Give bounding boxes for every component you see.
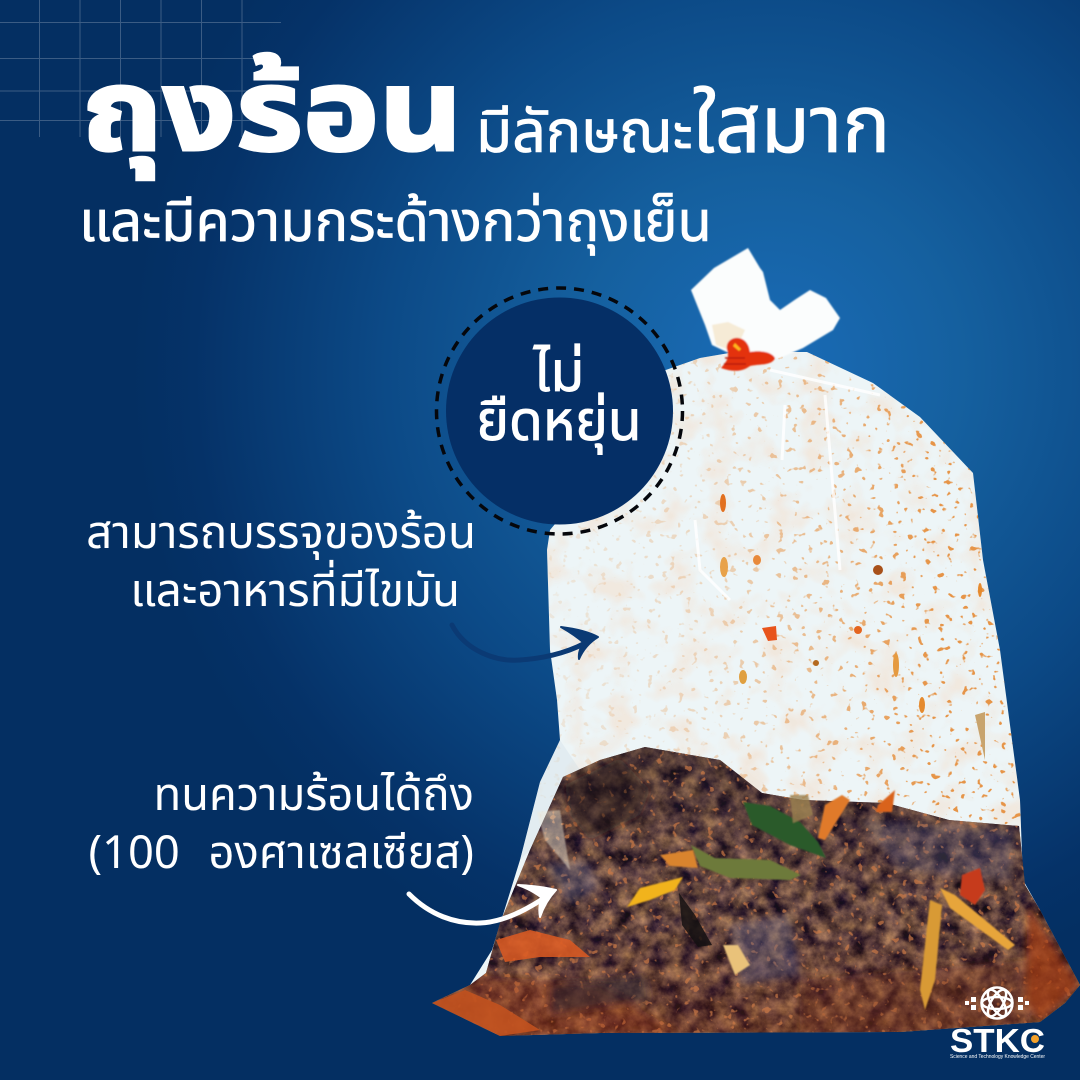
title text: มีลักษณะใสมาก: มีลักษณะใสมาก xyxy=(476,67,890,188)
text: temperature: (100 องศาเซลเซียส) xyxy=(88,821,474,889)
bag knot tuft xyxy=(691,248,840,371)
badge: ไม่ยืดหยุ่น xyxy=(434,286,684,536)
logo: STKC xyxy=(950,986,1045,1060)
text: hot goods: และอาหารที่มีไขมัน xyxy=(130,558,460,627)
badge: ไม่ยืดหยุ่น: ไม่ xyxy=(534,333,584,416)
text: temperature xyxy=(88,763,474,889)
title line 2: และมีความกระด้างกว่าถุงเย็น xyxy=(79,183,712,267)
text: hot goods: สามารถบรรจุของร้อน xyxy=(86,500,476,569)
bag body xyxy=(430,340,1080,1040)
curved arrow: white xyxy=(409,885,556,923)
food pieces xyxy=(537,790,1015,1010)
logo: STKC: STKC xyxy=(950,1022,1045,1059)
food inside bag xyxy=(430,745,1080,1040)
title xyxy=(79,30,890,267)
text: temperature: ทนความร้อนได้ถึง xyxy=(154,763,474,831)
text: hot goods xyxy=(86,500,476,627)
sauce spots on bag xyxy=(720,494,985,760)
title word: ถุงร้อน: ถุงร้อน xyxy=(82,30,462,202)
curved arrow: blue xyxy=(452,625,598,660)
logo: STKC: Science and Technology Knowledge Center xyxy=(950,1054,1045,1060)
decorative grid xyxy=(0,0,281,137)
badge: ไม่ยืดหยุ่น: ยืดหยุ่น xyxy=(476,382,642,465)
